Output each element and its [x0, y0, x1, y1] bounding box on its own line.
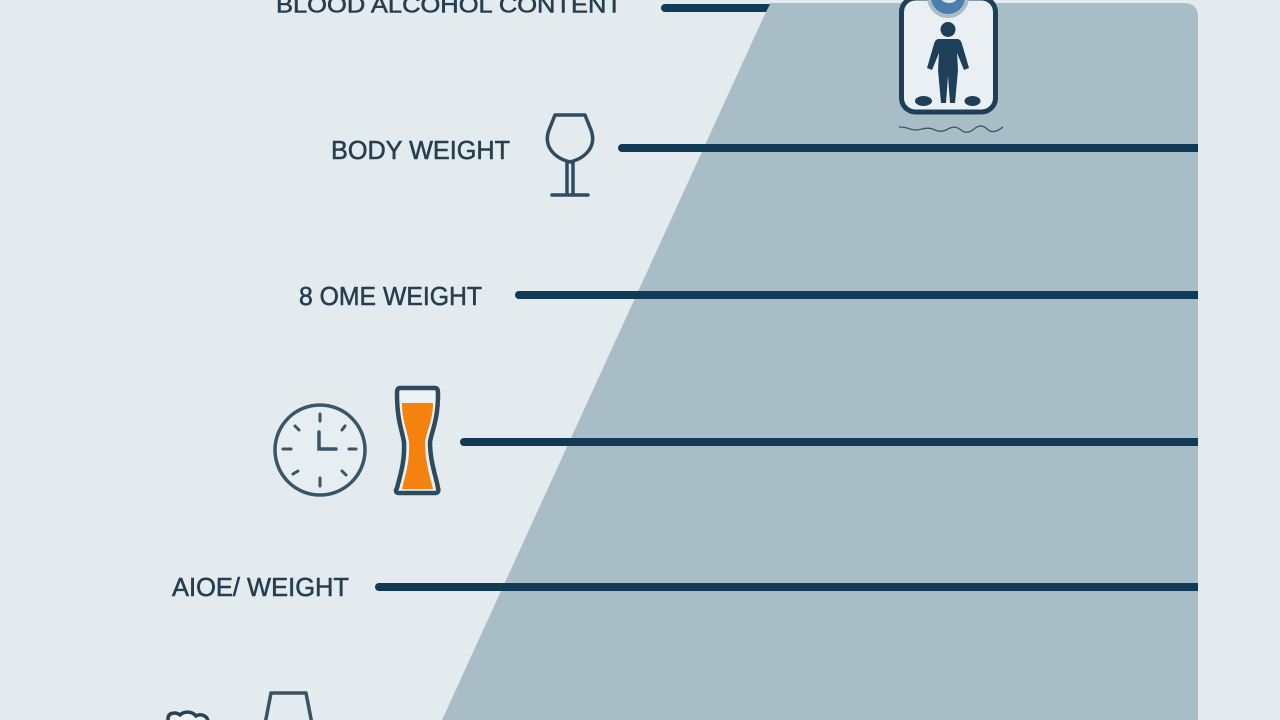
pointer line: body weight	[618, 144, 1198, 152]
panel: slanted grey-blue trapezoid	[442, 3, 1198, 720]
pointer line: age weight	[375, 583, 1198, 591]
icon detail: wavy ground line	[899, 126, 1003, 132]
icon detail: beer fill	[402, 403, 433, 489]
pointer line: time and drinks	[460, 438, 1198, 446]
icon: wine glass	[547, 115, 593, 195]
label: bone weight: 8 OME WEIGHT	[299, 281, 482, 311]
icon: clock	[275, 405, 365, 495]
icon detail: left foot plate	[915, 96, 932, 106]
icon detail: dial centre	[941, 0, 957, 3]
pointer line: bone weight	[515, 291, 1198, 299]
label: body weight: BODY WEIGHT	[331, 135, 510, 165]
icon: person on a scale	[899, 0, 1003, 132]
pointer line: blood alcohol content	[661, 4, 770, 12]
label: age weight: AIOE/ WEIGHT	[172, 572, 349, 602]
icon detail: blue dial	[929, 0, 967, 16]
icon: foam cloud, cropped	[168, 712, 208, 720]
icon detail: person	[927, 22, 969, 103]
icon: glass, cropped	[265, 693, 312, 720]
icon: beer glass	[396, 388, 438, 493]
icon detail: right foot plate	[964, 96, 980, 106]
